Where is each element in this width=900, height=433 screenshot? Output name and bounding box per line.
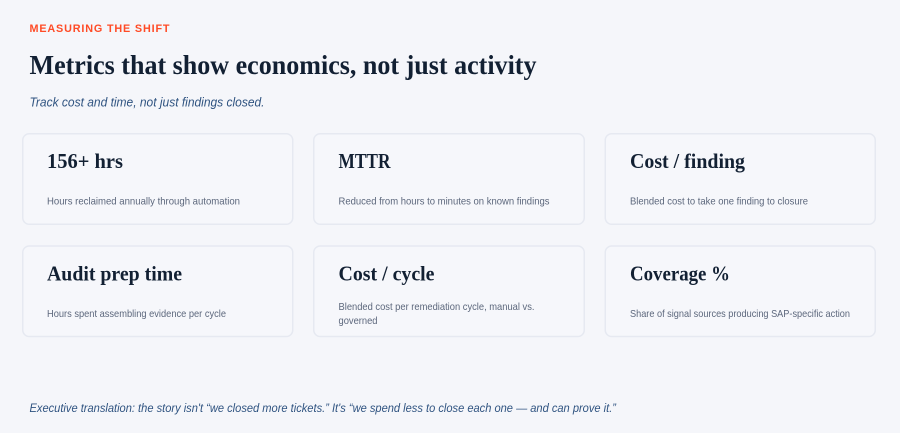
eyebrow label: MEASURING THE SHIFT xyxy=(30,23,170,35)
description xyxy=(338,302,534,327)
description: Blended cost per remediation cycle, manual vs. xyxy=(338,302,534,313)
description: Blended cost to take one finding to closure xyxy=(630,196,808,208)
description: Share of signal sources producing SAP-specific action xyxy=(630,309,850,320)
description: Hours spent assembling evidence per cycle xyxy=(47,309,226,320)
metric: Cost / cycle: Cost / cycle xyxy=(338,262,434,286)
metric: 156+ hrs: 156+ hrs xyxy=(47,149,123,173)
metric: Cost / finding: Cost / finding xyxy=(630,149,745,173)
panel: MTTR xyxy=(314,134,584,224)
panel: 156+ hrs xyxy=(23,134,293,224)
executive translation note: Executive translation: the story isn't “we closed more tickets.” It's “we spend less to close each one — and can prove it.” xyxy=(30,401,617,415)
description: governed xyxy=(338,316,378,327)
metric: Audit prep time: Audit prep time xyxy=(47,262,182,286)
panel: Audit prep time xyxy=(23,246,293,336)
subtitle: Track cost and time, not just findings closed. xyxy=(30,94,264,110)
description: Reduced from hours to minutes on known findings xyxy=(338,196,550,208)
description: Hours reclaimed annually through automation xyxy=(47,196,240,208)
metric: Coverage %: Coverage % xyxy=(630,262,730,286)
title: Metrics that show economics, not just activity xyxy=(30,50,537,80)
panel: Cost / cycle xyxy=(314,246,584,336)
panel: Coverage % xyxy=(605,246,875,336)
metric: MTTR: MTTR xyxy=(338,149,391,173)
panel: Cost / finding xyxy=(605,134,875,224)
